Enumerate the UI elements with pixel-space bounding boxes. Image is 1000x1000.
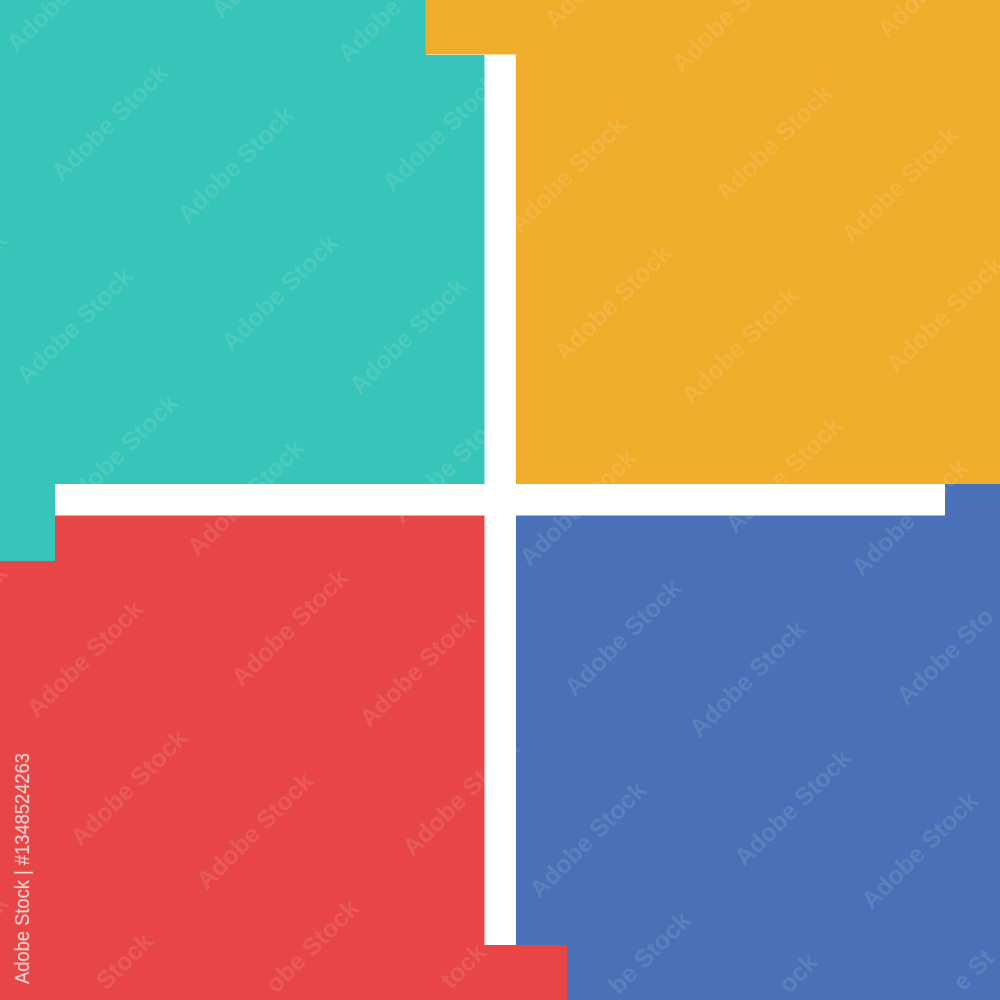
watermark: repeated diagonal stock text: Adobe Stock [676,282,804,410]
watermark: repeated diagonal stock text: Adobe Stock [46,59,174,187]
panel: red bottom-left quadrant [0,516,567,1000]
watermark: repeated diagonal stock text: obe Stock [260,894,365,999]
watermark: repeated diagonal stock text: Adobe Stock [354,605,482,733]
panel: blue bottom-right quadrant [516,484,1000,1000]
watermark: repeated diagonal stock text: ock [773,948,824,999]
watermark: repeated diagonal stock text: Adobe Stock [729,744,857,872]
watermark: repeated diagonal stock text: Adobe Stock [226,564,354,692]
watermark: repeated diagonal stock text: Adobe Stock [377,69,505,197]
watermark: repeated diagonal stock text: Adobe Sto [891,602,1000,711]
watermark: repeated diagonal stock text: Adobe Stock [504,111,632,239]
watermark: repeated diagonal stock text: Adobe Stock [172,101,300,229]
watermark: repeated diagonal stock text: Adobe Stock [684,615,812,743]
panel: teal top-left quadrant [0,0,484,561]
panel: orange top-right quadrant [426,0,1000,484]
watermark: repeated diagonal stock text: Adobe Stock [182,434,310,562]
watermark: repeated diagonal stock text: Adobe Stock [387,401,515,529]
watermark: repeated diagonal stock text: Adobe Stock [65,724,193,852]
watermark: repeated diagonal stock text: Adobe Stock [216,229,344,357]
watermark: repeated diagonal stock text: Adobe Stock [710,79,838,207]
watermark: repeated diagonal stock text: be Stock [603,906,697,1000]
watermark: repeated diagonal stock text: Adobe Stock [11,262,139,390]
watermark: repeated diagonal stock text: Adobe Stock [191,767,319,895]
watermark: repeated diagonal stock text: Adobe Stock [514,444,642,572]
watermark: repeated diagonal stock text: Adobe Stock [21,595,149,723]
watermark: repeated diagonal stock text: Adobe Stock [397,734,525,862]
watermark: repeated diagonal stock text: Adobe Stock [720,411,848,539]
watermark: repeated diagonal stock text: Stock [91,927,159,995]
watermark: repeated diagonal stock text: Adobe Stock [549,239,677,367]
watermark: repeated diagonal stock text: e St [948,944,1000,996]
watermark: repeated diagonal stock text: Adobe Stock [524,776,652,904]
vertical stock ID label: Adobe Stock | #1348524263 [12,753,34,984]
watermark: repeated diagonal stock text: Adobe Stock [559,574,687,702]
watermark: repeated diagonal stock text: Adobe Stock [344,272,472,400]
watermark: repeated diagonal stock text: tock [435,938,492,995]
watermark: repeated diagonal stock text: Adobe Stock [836,121,964,249]
watermark: repeated diagonal stock text: Adobe Stock [856,787,984,915]
watermark: repeated diagonal stock text: Adobe Stock [846,454,974,582]
watermark: repeated diagonal stock text: Adobe Stock [56,389,184,517]
